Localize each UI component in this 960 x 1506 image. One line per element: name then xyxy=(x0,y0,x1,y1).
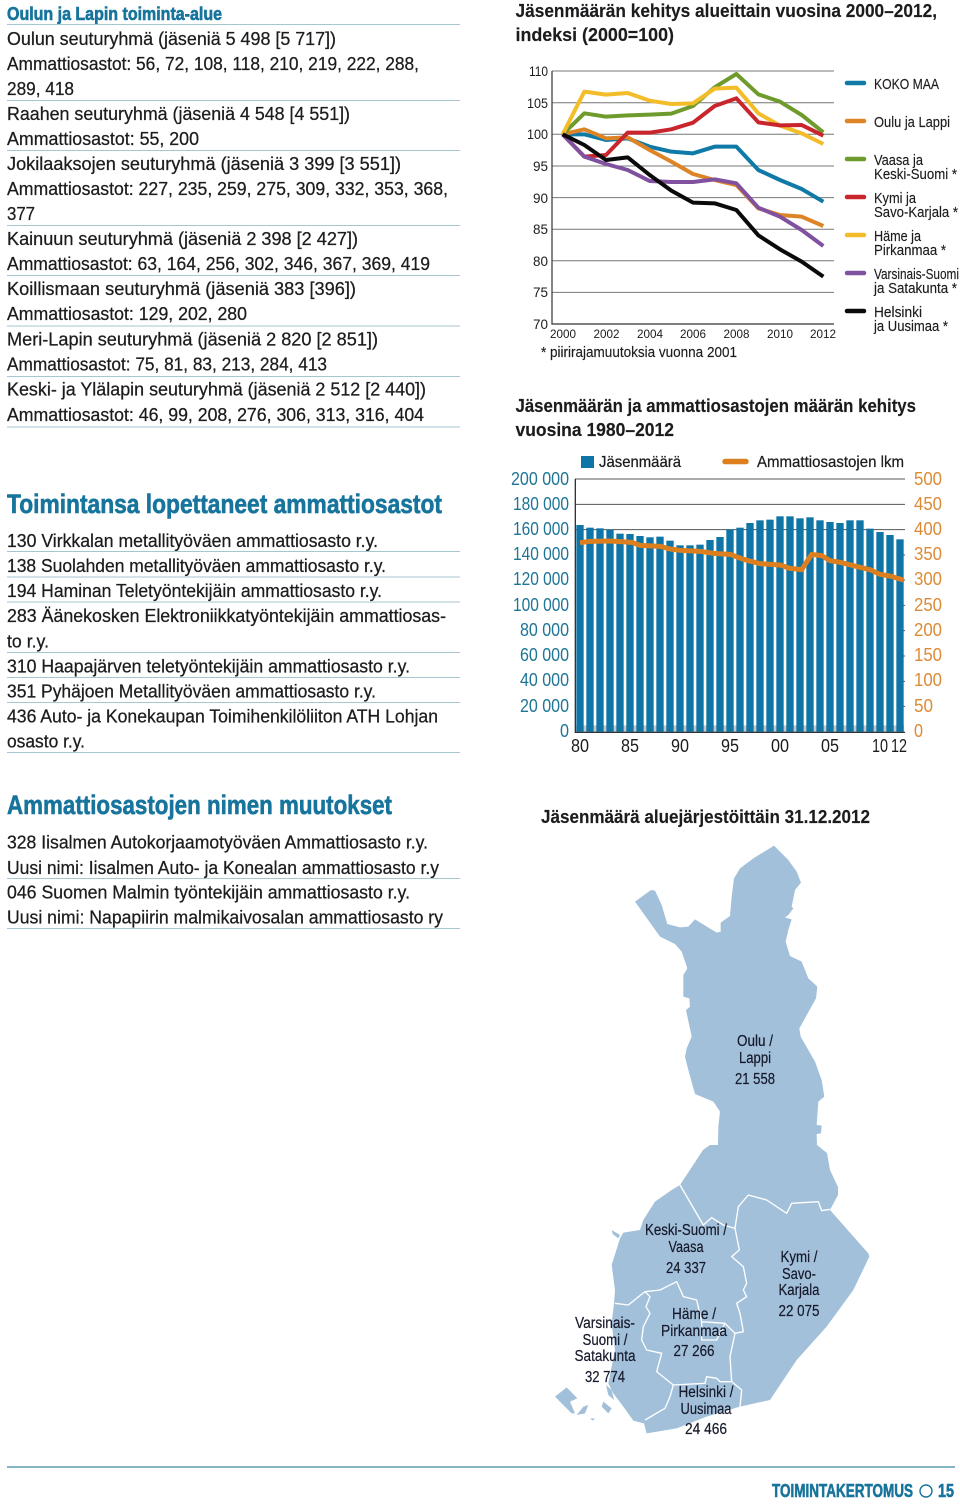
list: seutu's ammattiosastot: Ammattiosastot: 56, 72, 108, 118, 210, 219, 222, 288, xyxy=(7,54,419,74)
label: Helsinki / Uusimaa: Uusimaa xyxy=(680,1401,732,1418)
list: lopettaneet ammattiosastot: 194 Haminan Teletyöntekijäin ammattiosasto r.y. xyxy=(7,581,382,601)
label: Oulu / Lappi: 21 558 xyxy=(735,1071,775,1088)
footnote: * piirirajamuutoksia vuonna 2001 xyxy=(541,344,737,361)
label: Oulu / Lappi xyxy=(735,1033,775,1088)
right axis labels: 400 xyxy=(914,519,942,539)
label: Varsinais-Suomi / Satakunta xyxy=(574,1315,636,1386)
right axis labels: 100 xyxy=(914,670,942,690)
x axis labels: 90 xyxy=(671,736,689,756)
label: Kymi / Savo-Karjala: Kymi / xyxy=(780,1249,818,1266)
y axis labels: 90 xyxy=(533,190,548,206)
y axis line xyxy=(575,479,905,732)
label: Varsinais-Suomi / Satakunta: Satakunta xyxy=(574,1348,636,1365)
x axis labels: 85 xyxy=(621,736,639,756)
left axis labels: 140 000 xyxy=(513,544,569,564)
list: seutu's ammattiosastot: 377 xyxy=(7,204,35,224)
left axis labels: 80 000 xyxy=(520,620,569,640)
map title: Jäsenmäärä aluejärjestöittäin 31.12.2012 xyxy=(541,807,870,827)
legend: Ammattiosastojen lkm xyxy=(757,454,904,471)
heading: lopettaneet: Toimintansa lopettaneet ammattiosastot xyxy=(7,489,442,519)
label: Keski-Suomi / Vaasa: Vaasa xyxy=(668,1239,704,1256)
heading: nimen muutokset: Ammattiosastojen nimen muutokset xyxy=(7,790,392,820)
panel: bar and line chart 1980-2012 xyxy=(511,396,942,756)
legend xyxy=(581,454,904,471)
left axis labels xyxy=(511,469,569,741)
mainland xyxy=(608,846,869,1433)
left axis labels: 180 000 xyxy=(513,494,569,514)
line: Varsinais-Suomi ja Satakunta xyxy=(563,134,823,246)
list: lopettaneet ammattiosastot: 310 Haapajärven teletyöntekijäin ammattiosasto r.y. xyxy=(7,656,410,676)
label: Varsinais-Suomi / Satakunta: Suomi / xyxy=(582,1332,628,1349)
chart title: Jäsenmäärän ja ammattiosastojen määrän kehitys xyxy=(516,396,916,416)
list: seutu's ammattiosastot: Raahen seuturyhmä (jäseniä 4 548 [4 551]) xyxy=(7,104,350,124)
list: seutu's ammattiosastot: Ammattiosastot: 129, 202, 280 xyxy=(7,304,247,324)
label: Häme / Pirkanmaa: Pirkanmaa xyxy=(661,1323,727,1340)
chart title: indeksi (2000=100) xyxy=(516,25,674,45)
label: Keski-Suomi / Vaasa xyxy=(645,1222,728,1277)
label: Helsinki / Uusimaa: Helsinki / xyxy=(678,1384,734,1401)
x axis labels: 2006 xyxy=(680,327,706,341)
map: Finland regions xyxy=(555,846,869,1433)
legend: Jäsenmäärä xyxy=(599,454,681,471)
x axis labels: 10 xyxy=(872,736,888,756)
chart title: vuosina 1980–2012 xyxy=(516,420,674,440)
list: nimen muutokset: 046 Suomen Malmin työntekijäin ammattiosasto r.y. xyxy=(7,882,410,902)
y axis labels: 110 xyxy=(529,63,548,79)
label: Helsinki / Uusimaa xyxy=(678,1384,734,1438)
page number: 15 xyxy=(938,1481,954,1501)
right axis labels xyxy=(914,469,942,741)
x axis labels: 2010 xyxy=(767,327,793,341)
left axis labels: 120 000 xyxy=(513,569,569,589)
islands xyxy=(555,1230,620,1421)
x axis labels xyxy=(571,736,907,756)
list: seutu's ammattiosastot: Ammattiosastot: 46, 99, 208, 276, 306, 313, 316, 404 xyxy=(7,405,424,425)
left axis labels: 0 xyxy=(560,721,569,741)
line: Kymi ja Savo-Karjala xyxy=(563,98,823,157)
legend: Oulu ja Lappi xyxy=(874,114,950,131)
label: Keski-Suomi / Vaasa: 24 337 xyxy=(666,1260,706,1277)
panel: Ammattiosastojen nimen muutokset xyxy=(7,790,460,928)
region borders xyxy=(615,1185,830,1420)
x axis labels: 00 xyxy=(771,736,789,756)
label: Varsinais-Suomi / Satakunta: Varsinais- xyxy=(575,1315,635,1332)
label: Häme / Pirkanmaa: Häme / xyxy=(672,1306,717,1323)
panel: membership map xyxy=(541,807,870,1438)
list: lopettaneet ammattiosastot: 351 Pyhäjoen Metallityöväen ammattiosasto r.y. xyxy=(7,682,376,702)
x axis labels: 05 xyxy=(821,736,839,756)
list: nimen muutokset: Uusi nimi: Napapiirin malmikaivosalan ammattiosasto ry xyxy=(7,908,443,928)
left axis labels: 60 000 xyxy=(520,645,569,665)
legend: Helsinki xyxy=(874,304,922,321)
list: lopettaneet ammattiosastot: to r.y. xyxy=(7,632,49,652)
chart title xyxy=(516,1,937,45)
list: lopettaneet ammattiosastot: 283 Äänekosken Elektroniikkatyöntekijäin ammattiosas- xyxy=(7,606,446,626)
left axis labels: 100 000 xyxy=(513,595,569,615)
right axis labels: 50 xyxy=(914,696,933,716)
label: Varsinais-Suomi / Satakunta: 32 774 xyxy=(585,1369,625,1386)
x axis labels: 2000 xyxy=(550,327,576,341)
right axis labels: 250 xyxy=(914,595,942,615)
label: Kymi / Savo-Karjala: Karjala xyxy=(778,1282,820,1299)
legend: Vaasa ja xyxy=(874,152,924,169)
icon: circle separator xyxy=(920,1485,932,1497)
list: seutu's ammattiosastot: 289, 418 xyxy=(7,79,74,99)
list: seutu's ammattiosastot xyxy=(7,29,448,425)
y axis labels: 70 xyxy=(533,316,548,332)
x axis labels: 95 xyxy=(721,736,739,756)
list: lopettaneet ammattiosastot: osasto r.y. xyxy=(7,732,85,752)
x axis labels: 2008 xyxy=(724,327,750,341)
right axis labels: 450 xyxy=(914,494,942,514)
grey ticks at base xyxy=(576,725,904,732)
bars: jäsenmäärä xyxy=(576,516,904,732)
list: nimen muutokset: Uusi nimi: Iisalmen Auto- ja Konealan ammattiosasto r.y xyxy=(7,858,439,878)
left axis labels: 160 000 xyxy=(513,519,569,539)
legend: KOKO MAA xyxy=(874,76,939,93)
list: nimen muutokset xyxy=(7,832,443,928)
grid lines and axis xyxy=(552,71,834,292)
panel: Toimintansa lopettaneet ammattiosastot xyxy=(7,489,460,752)
legend: ja Uusimaa * xyxy=(873,318,948,335)
list: nimen muutokset: 328 Iisalmen Autokorjaamotyöväen Ammattiosasto r.y. xyxy=(7,832,428,852)
label: Kymi / Savo-Karjala xyxy=(778,1249,820,1320)
legend: Pirkanmaa * xyxy=(874,242,946,259)
list: lopettaneet ammattiosastot: 130 Virkkalan metallityöväen ammattiosasto r.y. xyxy=(7,531,378,551)
label: Oulu / Lappi: Lappi xyxy=(739,1050,771,1067)
list: seutu's ammattiosastot: Ammattiosastot: 75, 81, 83, 213, 284, 413 xyxy=(7,354,327,374)
panel: Oulun ja Lapin toiminta-alue xyxy=(7,4,460,427)
label: Häme / Pirkanmaa: 27 266 xyxy=(674,1343,714,1360)
list: lopettaneet ammattiosastot xyxy=(7,531,446,752)
right axis labels: 500 xyxy=(914,469,942,489)
x axis labels xyxy=(550,327,836,341)
data lines xyxy=(563,74,823,277)
footer title: TOIMINTAKERTOMUS xyxy=(772,1481,913,1501)
x axis labels: 2004 xyxy=(637,327,663,341)
heading: toiminta-alue: Oulun ja Lapin toiminta-alue xyxy=(7,4,222,24)
x axis labels: 12 xyxy=(891,736,907,756)
right axis labels: 350 xyxy=(914,544,942,564)
chart title xyxy=(516,396,916,440)
gap mask xyxy=(576,547,902,732)
list: seutu's ammattiosastot: Kainuun seuturyhmä (jäseniä 2 398 [2 427]) xyxy=(7,229,358,249)
label: Oulu / Lappi: Oulu / xyxy=(737,1033,774,1050)
plot: bars and line xyxy=(575,479,905,732)
grid lines xyxy=(575,479,905,706)
y axis labels: 105 xyxy=(527,95,548,111)
y axis labels: 85 xyxy=(533,221,548,237)
x axis labels: 80 xyxy=(571,736,589,756)
legend xyxy=(847,76,959,335)
list: seutu's ammattiosastot: Oulun seuturyhmä (jäseniä 5 498 [5 717]) xyxy=(7,29,336,49)
label: Keski-Suomi / Vaasa: Keski-Suomi / xyxy=(645,1222,728,1239)
list: seutu's ammattiosastot: Jokilaaksojen seuturyhmä (jäseniä 3 399 [3 551]) xyxy=(7,154,401,174)
panel: line chart index 2000-2012 xyxy=(516,1,959,361)
axis frame xyxy=(552,71,834,324)
list: lopettaneet ammattiosastot: 436 Auto- ja Konekaupan Toimihenkilöliiton ATH Lohjan xyxy=(7,706,438,726)
y axis labels: 100 xyxy=(527,126,548,142)
list: seutu's ammattiosastot: Ammattiosastot: 227, 235, 259, 275, 309, 332, 353, 368, xyxy=(7,179,448,199)
list: seutu's ammattiosastot: Ammattiosastot: 63, 164, 256, 302, 346, 367, 369, 419 xyxy=(7,254,430,274)
list: seutu's ammattiosastot: Meri-Lapin seuturyhmä (jäseniä 2 820 [2 851]) xyxy=(7,330,378,350)
left axis labels: 200 000 xyxy=(511,469,569,489)
label: Kymi / Savo-Karjala: 22 075 xyxy=(778,1303,820,1320)
chart title: Jäsenmäärän kehitys alueittain vuosina 2000–2012, xyxy=(516,1,937,21)
right axis labels: 0 xyxy=(914,721,923,741)
right axis labels: 150 xyxy=(914,645,942,665)
legend: Kymi ja xyxy=(874,190,917,207)
line: ammattiosastojen lkm xyxy=(580,541,903,580)
line: Vaasa ja Keski-Suomi xyxy=(563,74,823,134)
list: seutu's ammattiosastot: Ammattiosastot: 55, 200 xyxy=(7,129,199,149)
legend: Häme ja xyxy=(874,228,922,245)
y axis labels: 95 xyxy=(533,158,548,174)
x axis labels: 2002 xyxy=(594,327,620,341)
list: seutu's ammattiosastot: Koillismaan seuturyhmä (jäseniä 383 [396]) xyxy=(7,279,356,299)
left axis labels: 40 000 xyxy=(520,670,569,690)
label: Kymi / Savo-Karjala: Savo- xyxy=(782,1266,816,1283)
y axis labels: 75 xyxy=(533,284,548,300)
x axis labels: 2012 xyxy=(810,327,836,341)
list: seutu's ammattiosastot: Keski- ja Ylälapin seuturyhmä (jäseniä 2 512 [2 440]) xyxy=(7,380,426,400)
label: Häme / Pirkanmaa xyxy=(661,1306,727,1360)
label: Helsinki / Uusimaa: 24 466 xyxy=(685,1421,727,1438)
right axis labels: 300 xyxy=(914,569,942,589)
list: lopettaneet ammattiosastot: 138 Suolahden metallityöväen ammattiosasto r.y. xyxy=(7,556,386,576)
y axis labels xyxy=(527,63,548,332)
line: KOKO MAA xyxy=(563,134,823,202)
right axis labels: 200 xyxy=(914,620,942,640)
line: Oulu ja Lappi xyxy=(563,129,823,226)
line: Helsinki ja Uusimaa xyxy=(563,134,823,277)
left axis labels: 20 000 xyxy=(520,696,569,716)
y axis labels: 80 xyxy=(533,253,548,269)
footer xyxy=(7,1467,955,1501)
line: Häme ja Pirkanmaa xyxy=(563,88,823,144)
